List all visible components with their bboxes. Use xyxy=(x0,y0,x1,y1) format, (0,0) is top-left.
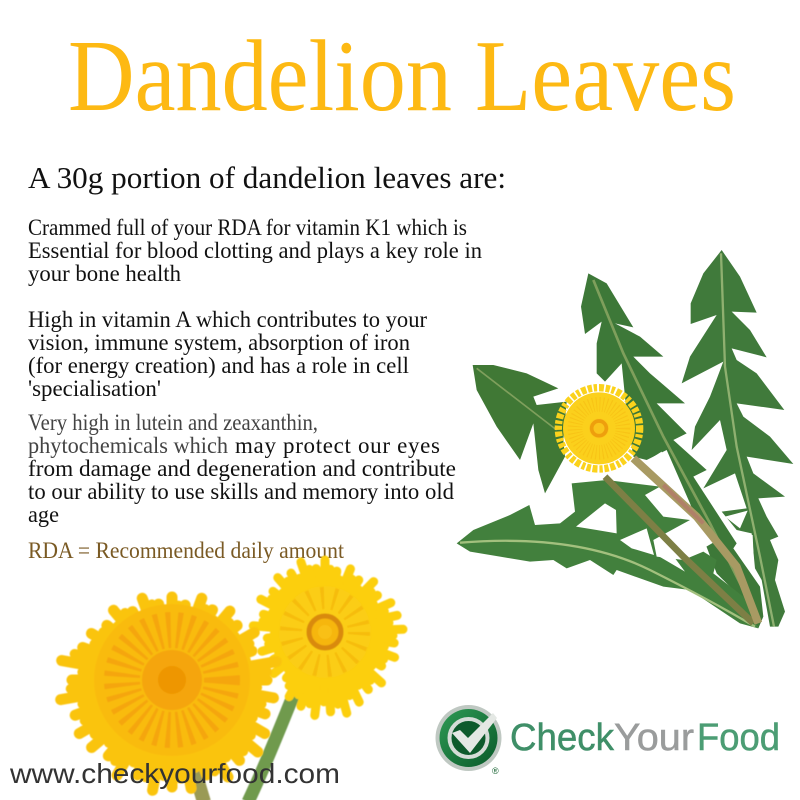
text block: vitamin A: (for energy creation) and has a role in cell xyxy=(28,353,409,378)
illustration: dandelion leaves and flower xyxy=(457,250,793,628)
illustration: dandelion flower left xyxy=(61,597,276,800)
flower: leaf dandelion xyxy=(558,388,640,469)
text block: lutein and zeaxanthin: Very high in lutein and zeaxanthin, xyxy=(28,410,318,435)
text block: lutein and zeaxanthin: age xyxy=(28,502,59,527)
leaf: left xyxy=(473,365,567,493)
text block: vitamin K1 xyxy=(28,215,482,286)
flower stem xyxy=(248,684,298,800)
website url: www.checkyourfood.com xyxy=(9,758,340,789)
illustration: dandelion flower right xyxy=(248,560,403,800)
logo icon: check badge xyxy=(436,705,502,771)
leaf: right xyxy=(682,250,793,627)
logo wordmark: Food xyxy=(697,717,780,759)
petals xyxy=(253,560,403,715)
title: Dandelion Leaves xyxy=(68,20,736,133)
text block: vitamin K1: Essential for blood clotting and plays a key role in xyxy=(28,238,482,263)
logo wordmark xyxy=(510,717,780,759)
logo wordmark: Check xyxy=(510,717,615,759)
logo: CheckYourFood xyxy=(436,705,780,776)
text block: vitamin A: vision, immune system, absorption of iron xyxy=(28,330,410,355)
RDA footnote: RDA = Recommended daily amount xyxy=(28,538,345,563)
text block: vitamin K1: Crammed full of your RDA for vitamin K1 which is xyxy=(28,215,467,240)
text block: vitamin A: 'specialisation' xyxy=(28,376,161,401)
text block: vitamin K1: your bone health xyxy=(28,261,181,286)
text block: vitamin A: High in vitamin A which contributes to your xyxy=(28,307,427,332)
leaf gaps xyxy=(576,452,754,572)
text block: lutein and zeaxanthin: to our ability to use skills and memory into old xyxy=(28,479,454,504)
petals xyxy=(61,597,276,790)
text block: vitamin A xyxy=(28,307,427,401)
text block: lutein and zeaxanthin: phytochemicals which xyxy=(28,433,228,458)
leaf: bottom xyxy=(457,480,758,628)
stems xyxy=(605,458,758,623)
text block: lutein and zeaxanthin xyxy=(28,410,456,527)
flower stem xyxy=(192,762,204,800)
leaf: middle xyxy=(581,273,763,628)
logo wordmark: Your xyxy=(614,717,694,759)
registered mark: ® xyxy=(492,766,499,776)
text block: lutein and zeaxanthin: from damage and degeneration and contribute xyxy=(28,456,456,481)
text block: lutein and zeaxanthin: may protect our eyes xyxy=(235,433,440,458)
heading: portion intro: A 30g portion of dandelion leaves are: xyxy=(28,160,506,195)
